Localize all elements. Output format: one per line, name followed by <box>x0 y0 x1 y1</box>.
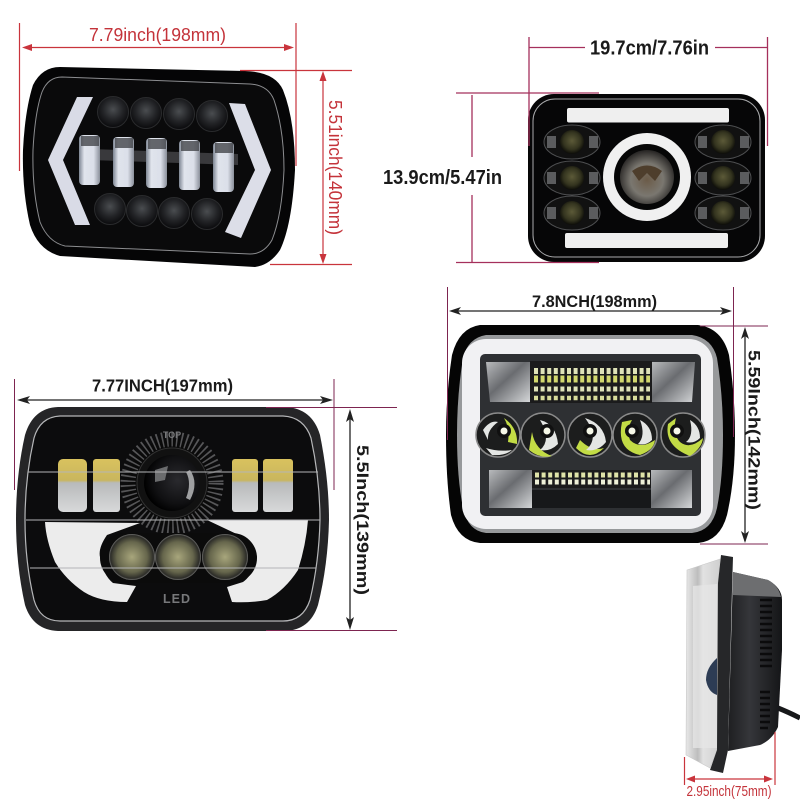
lens bump <box>706 658 717 695</box>
TOP mark: TOP <box>163 430 181 440</box>
projector gear and lens <box>128 439 216 527</box>
white crescent right <box>207 520 308 602</box>
bottom row of lenses <box>94 194 222 230</box>
horizontal reflection lines <box>26 472 320 568</box>
red height dimension 1 <box>240 70 352 264</box>
black height dimension 3 <box>266 408 397 630</box>
LED mark: LED <box>163 592 191 606</box>
halo ring and centre lens <box>603 133 691 221</box>
red width dimension 1 <box>20 23 296 171</box>
panel: arrow-style headlight with red dimensions <box>20 23 352 267</box>
LED pill with three lenses <box>100 533 257 583</box>
right ribbed lamps <box>232 459 293 512</box>
panel: projector headlight with LED pill <box>14 376 397 631</box>
side view body <box>686 555 800 773</box>
left chevron light <box>48 97 93 225</box>
red height dimension 1: 5.51inch(140mm) <box>325 100 345 235</box>
width dimension 4: 7.8NCH(198mm) <box>532 292 657 311</box>
headlight housing 2 <box>528 94 765 262</box>
panel: chrome headlight with white halo <box>446 287 768 544</box>
red width dimension 1: 7.79inch(198mm) <box>89 25 226 45</box>
panel: halo-ring headlight with crimson dimensions <box>383 36 768 262</box>
lower dark recess <box>532 490 651 508</box>
white crescent left <box>45 522 140 602</box>
black width dimension 3 <box>14 376 334 490</box>
five vertical lamps <box>79 135 234 192</box>
crimson width dimension 2: 19.7cm/7.76in <box>590 36 709 60</box>
top LED strip <box>530 361 652 403</box>
bottom light bar <box>565 233 728 248</box>
cooling fins <box>760 600 772 728</box>
headlight housing 1 <box>23 67 295 267</box>
headlight housing 4 <box>446 325 735 543</box>
mounting ring <box>710 555 733 773</box>
centre bar <box>90 149 238 165</box>
width dimension 4 <box>448 287 734 440</box>
headlight housing 3 <box>16 407 329 631</box>
chrome reflector <box>480 354 701 516</box>
bottom LED strip <box>532 470 651 488</box>
crimson height dimension 2: 13.9cm/5.47in <box>383 166 502 189</box>
top row of lenses <box>98 96 228 132</box>
black height dimension 3: 5.5Inch(139mm) <box>353 445 371 595</box>
chrome lens side <box>686 559 720 768</box>
red depth dimension <box>684 732 775 800</box>
height dimension 4: 5.59Inch(142mm) <box>744 350 762 510</box>
right chevron light <box>225 103 271 238</box>
left three LED pods <box>544 125 600 230</box>
power cable <box>778 708 800 718</box>
five swirl reflector lenses <box>476 413 705 457</box>
panel: side view of headlight <box>684 555 800 800</box>
left ribbed lamps <box>58 459 120 512</box>
white halo ring <box>462 339 713 529</box>
black width dimension 3: 7.77INCH(197mm) <box>92 376 233 396</box>
right three LED pods <box>695 125 751 230</box>
rear housing <box>728 572 782 751</box>
height dimension 4 <box>700 326 768 544</box>
top light bar <box>567 108 729 122</box>
red depth dimension: 2.95inch(75mm) <box>686 784 772 800</box>
